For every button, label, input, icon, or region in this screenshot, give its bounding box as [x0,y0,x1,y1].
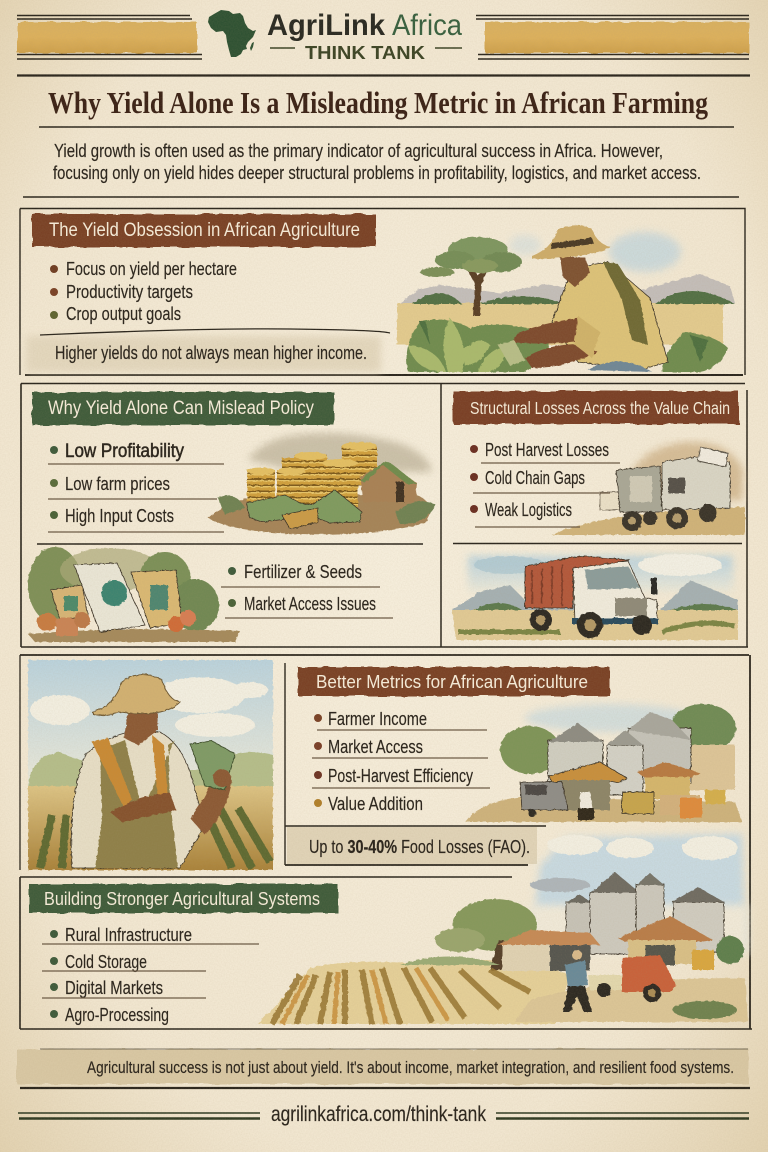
heading banner: Better Metrics for African Agriculture [316,671,588,692]
panel: building stronger agricultural systems [20,834,752,1029]
callout tint [287,827,537,864]
panel: why yield alone can mislead policy [21,384,748,647]
bullet list: Fertilizer & Seeds [244,562,362,582]
right ochre band [476,16,749,59]
panel: better metrics [285,663,742,865]
bullet list: Crop output goals [66,304,181,324]
bullet list [312,709,490,814]
callout text: Up to 30-40% Food Losses (FAO). [309,837,530,857]
bullet list: Weak Logistics [485,500,572,520]
panel: the yield obsession [20,208,745,375]
illustration: seed bags and produce [28,547,240,642]
logo text: Africa [392,9,462,42]
heading banner: The Yield Obsession in African Agriculture [49,220,360,241]
footer url: agrilinkafrica.com/think-tank [271,1103,486,1126]
callout text: Higher yields do not always mean higher income. [55,343,367,363]
bullet list [42,925,259,1025]
heading banner [32,392,334,425]
illustration: red cargo truck [452,554,738,640]
illustration: farm with silos [258,834,748,1024]
intro text: Yield growth is often used as the primary indicator of agricultural success in Africa. However, [54,141,663,161]
bullet list: Market Access [328,737,423,757]
illustration: farmer in crop field [397,225,735,372]
heading banner [453,391,739,424]
bullet list: Low farm prices [65,474,170,494]
left ochre band [17,16,202,59]
bullet list: Rural Infrastructure [65,925,192,945]
logo text [267,9,462,63]
illustration: farmer holding cash [28,660,273,870]
panel: structural losses [452,391,745,640]
heading banner: Building Stronger Agricultural Systems [44,888,320,909]
heading banner [298,667,610,696]
heading banner: Why Yield Alone Can Mislead Policy [48,398,314,419]
bullet list: Post-Harvest Efficiency [328,766,473,786]
bullet list [48,441,224,532]
bullet list: Digital Markets [65,978,163,998]
bullet list: Cold Storage [65,952,147,972]
bullet list: Productivity targets [66,282,193,302]
icon: map of Africa [208,10,256,57]
illustration: grain silos and market [465,704,742,822]
bullet list: Value Addition [328,794,423,814]
bullet list: Market Access Issues [244,594,376,614]
bullet list: Farmer Income [328,709,427,729]
bullet list: High Input Costs [65,506,174,526]
bullet list: Low Profitability [65,441,184,462]
intro text [53,141,701,183]
bullet list: Post Harvest Losses [485,440,609,460]
bullet list: Focus on yield per hectare [66,259,237,279]
logo text: AgriLink [267,9,385,42]
bullet list [50,259,237,324]
illustration: white truck [552,442,745,535]
callout tint [26,336,381,372]
heading banner [29,884,338,913]
closing statement band [17,1049,749,1084]
bullet list: Cold Chain Gaps [485,468,585,488]
header [17,9,749,63]
bullet list [221,562,393,618]
bullet list: Agro-Processing [65,1005,169,1025]
illustration: coin stacks and barn [208,433,436,534]
bullet list [470,440,620,527]
logo text: THINK TANK [305,43,425,63]
heading banner [32,214,376,247]
